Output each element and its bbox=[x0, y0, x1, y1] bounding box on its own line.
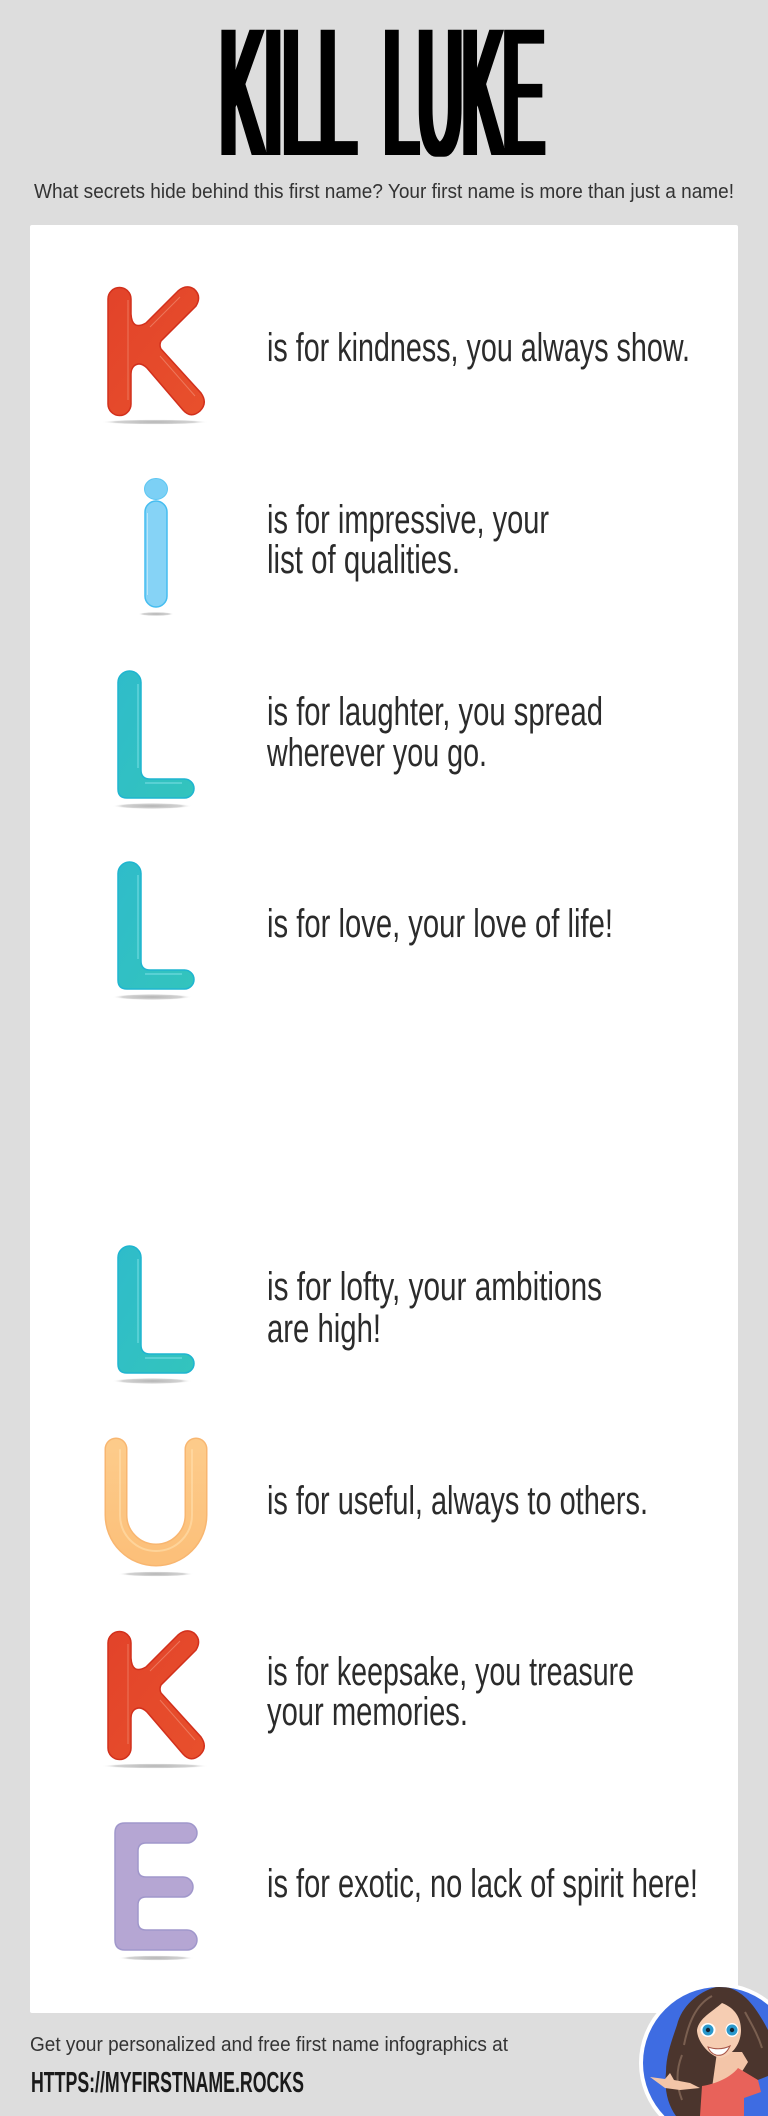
hair strands bbox=[678, 1996, 762, 2100]
icon: letter U orange bbox=[116, 1449, 196, 1576]
letter U row bbox=[116, 1449, 648, 1576]
shirt bbox=[700, 2068, 761, 2116]
neck bbox=[712, 2052, 748, 2084]
panel: letters bbox=[30, 225, 738, 2013]
text: K2: is for keepsake, you treasure bbox=[267, 1650, 634, 1694]
text: L1 bbox=[266, 690, 603, 775]
subtitle: What secrets hide behind this first name? Your first name is more than just a name! bbox=[34, 181, 734, 203]
letter L row 2 bbox=[112, 862, 613, 1000]
text: L1: wherever you go. bbox=[266, 731, 487, 775]
text: L3 bbox=[267, 1265, 602, 1351]
icon: letter L teal bbox=[112, 1246, 194, 1384]
text: L3: are high! bbox=[267, 1307, 381, 1351]
icon: letter L teal bbox=[112, 671, 194, 809]
text: L1: is for laughter, you spread bbox=[267, 690, 603, 734]
smile bbox=[708, 2046, 730, 2055]
text: L3: is for lofty, your ambitions bbox=[267, 1265, 602, 1309]
letter i row bbox=[138, 478, 549, 616]
footer url: HTTPS://MYFIRSTNAME.ROCKS bbox=[31, 2067, 304, 2099]
avatar bbox=[639, 1983, 768, 2116]
letter E row bbox=[115, 1823, 698, 1960]
hand bbox=[650, 2073, 700, 2090]
letter K row bbox=[101, 287, 690, 424]
hair bbox=[665, 1986, 768, 2116]
text: K2: your memories. bbox=[267, 1690, 468, 1734]
icon: letter L teal bbox=[112, 862, 194, 1000]
text: i bbox=[267, 498, 549, 582]
text: i: list of qualities. bbox=[267, 538, 460, 582]
text: K2 bbox=[267, 1650, 634, 1734]
icon: letter K red bbox=[101, 1631, 209, 1768]
text: i: is for impressive, your bbox=[267, 498, 549, 542]
letter L row 3 bbox=[112, 1246, 602, 1384]
eyes bbox=[700, 2023, 738, 2037]
icon: letter K red bbox=[101, 287, 209, 424]
letter K row 2 bbox=[101, 1631, 634, 1768]
text: L2: is for love, your love of life! bbox=[267, 902, 613, 946]
letter L row 1 bbox=[112, 671, 603, 809]
icon: letter E purple bbox=[115, 1823, 197, 1960]
footer invite text: Get your personalized and free first name infographics at bbox=[30, 2034, 508, 2056]
face bbox=[697, 2003, 741, 2058]
icon: letter i blue bbox=[138, 478, 174, 616]
